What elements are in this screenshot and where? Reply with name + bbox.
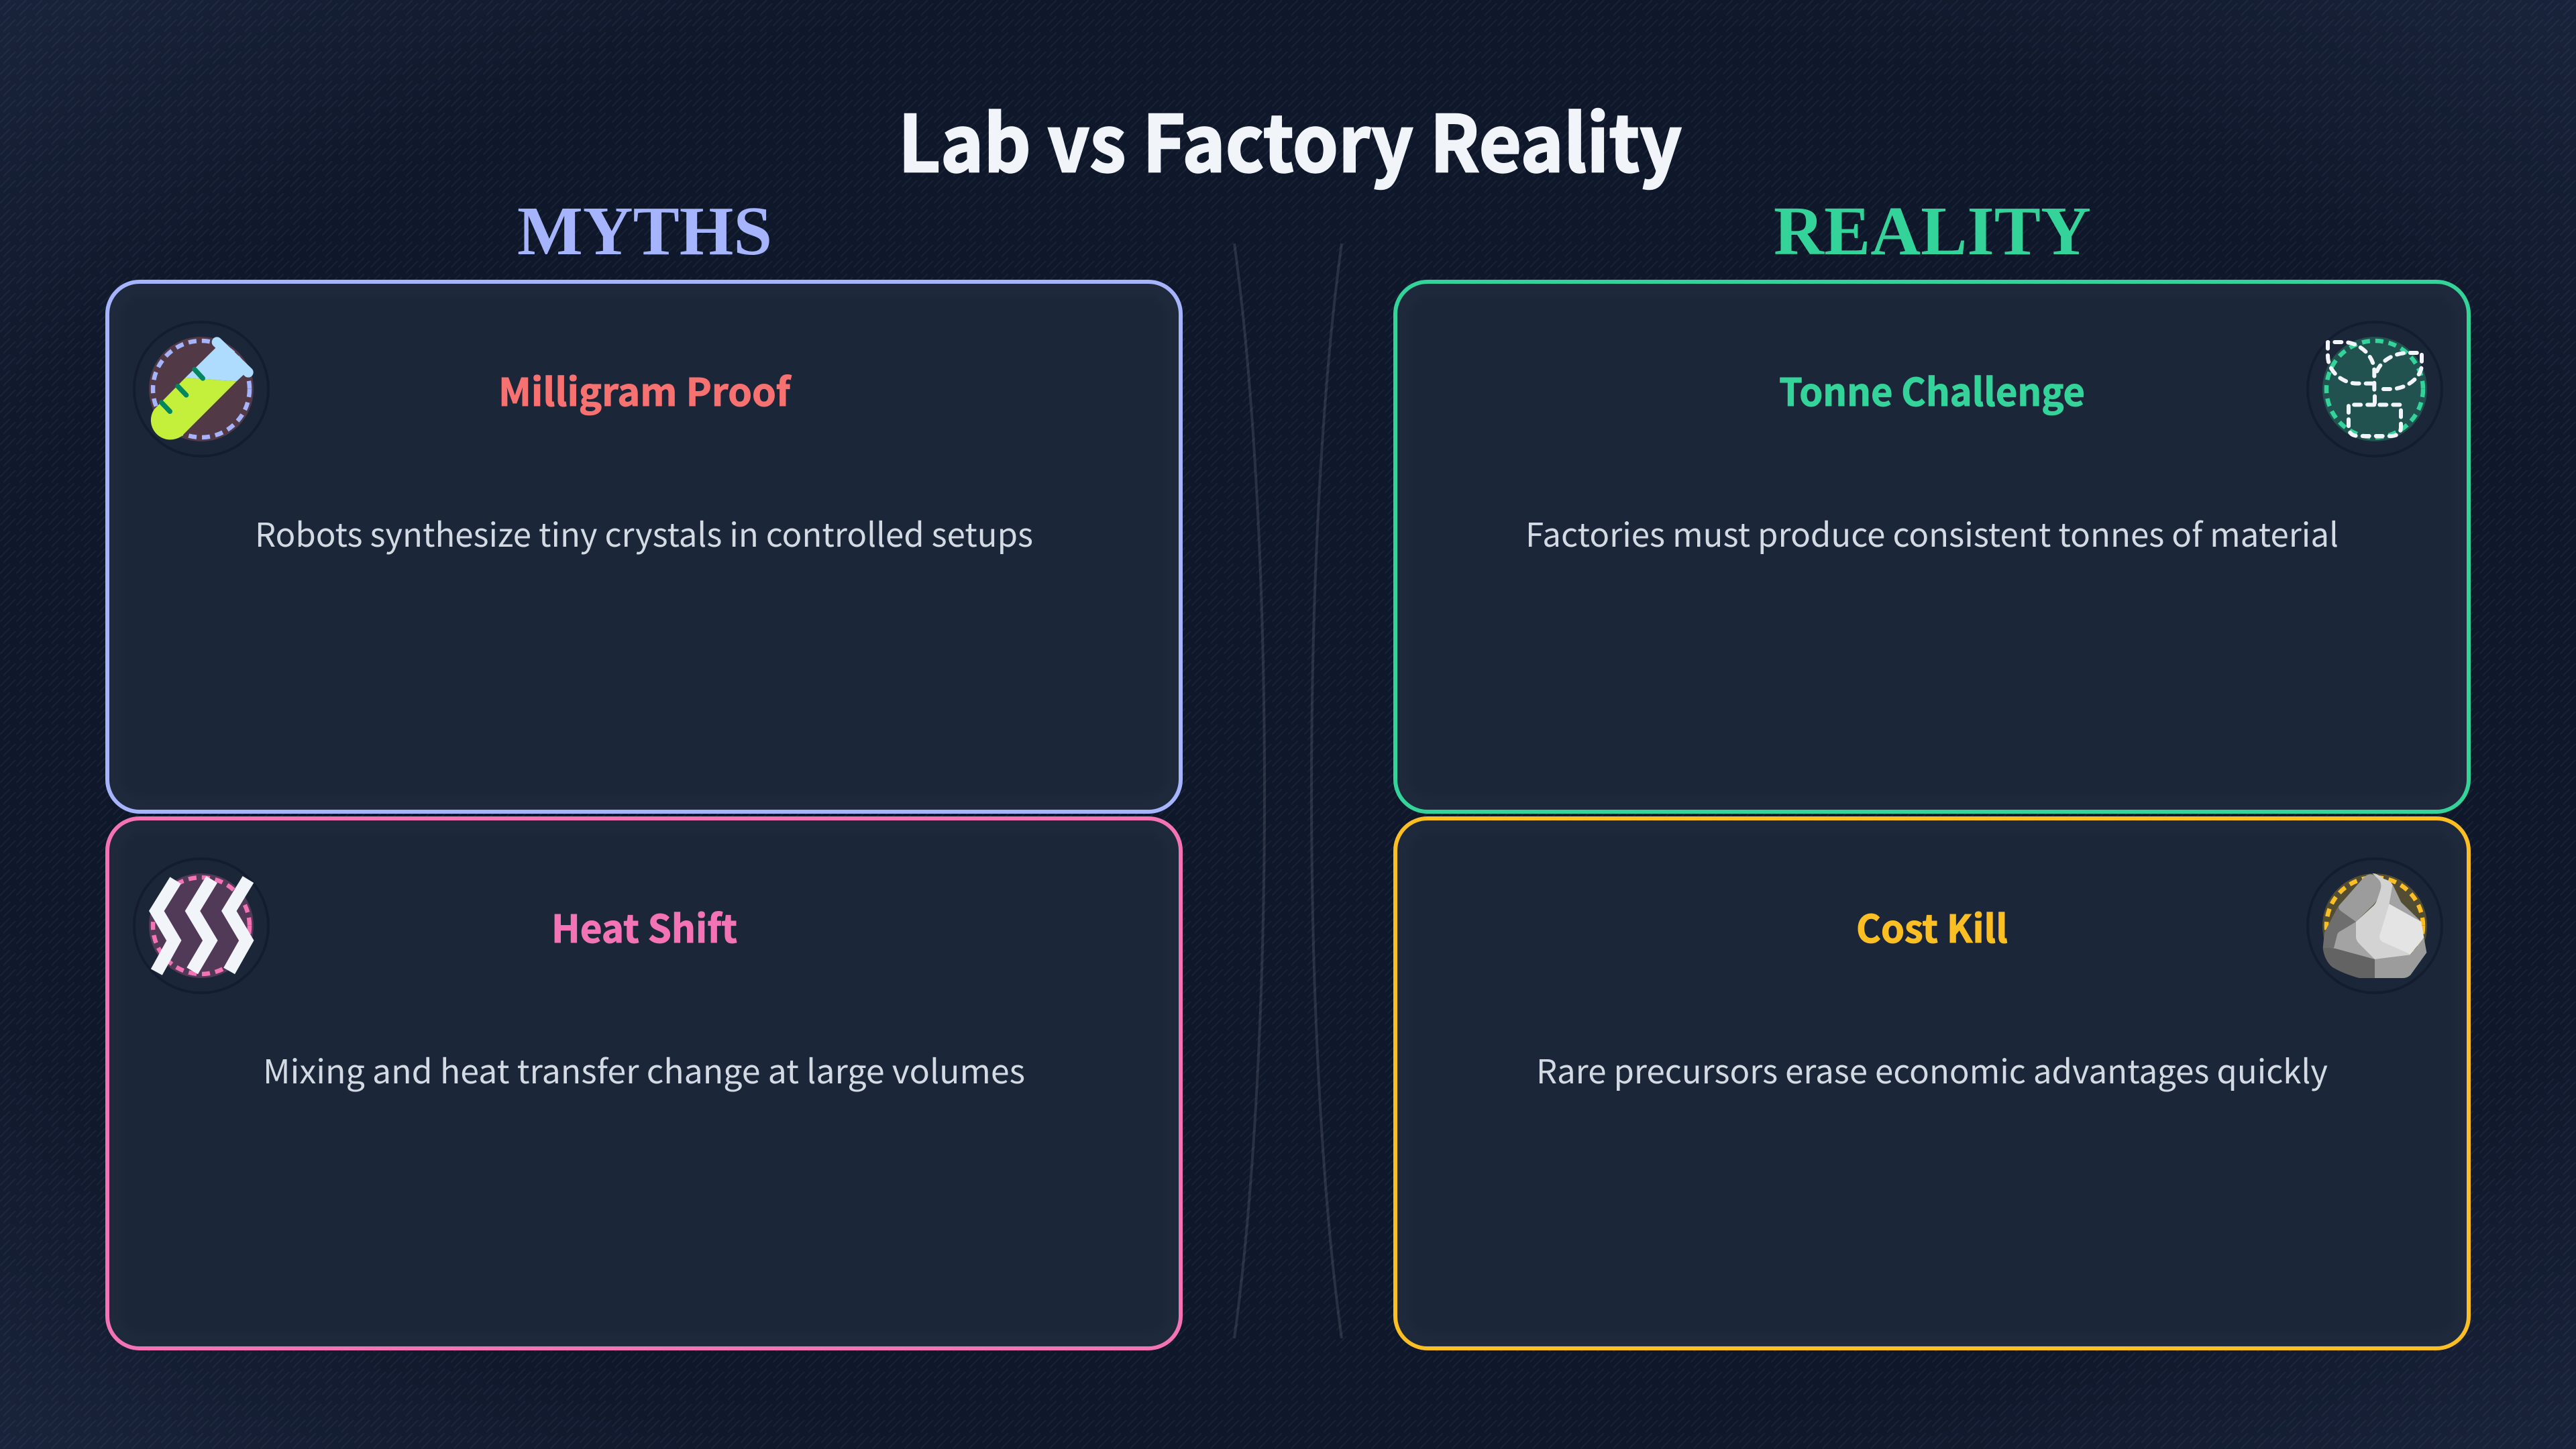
panel: milligram proof bbox=[107, 282, 1181, 812]
icon: heat waves bbox=[134, 859, 268, 993]
card title: Milligram Proof bbox=[498, 362, 792, 417]
icon: test tube bbox=[134, 322, 268, 456]
card body: Mixing and heat transfer change at large volumes bbox=[263, 1046, 1025, 1093]
center divider curves bbox=[1234, 244, 1342, 1338]
heading: reality: REALITY bbox=[1774, 193, 2091, 270]
heading: myths: MYTHS bbox=[517, 193, 772, 270]
icon: plant bbox=[2308, 322, 2442, 456]
card body: Rare precursors erase economic advantages quickly bbox=[1536, 1046, 2328, 1093]
icon: rock bbox=[2308, 859, 2442, 993]
card title: Cost Kill bbox=[1856, 899, 2008, 954]
panel: tonne challenge bbox=[1395, 282, 2469, 812]
panel: cost kill bbox=[1395, 818, 2469, 1348]
panel: heat shift bbox=[107, 818, 1181, 1348]
card title: Heat Shift bbox=[551, 899, 737, 954]
card body: Factories must produce consistent tonnes of material bbox=[1525, 509, 2339, 557]
card title: Tonne Challenge bbox=[1779, 362, 2085, 417]
title: Lab vs Factory Reality bbox=[898, 82, 1682, 195]
card body: Robots synthesize tiny crystals in controlled setups bbox=[255, 509, 1033, 557]
